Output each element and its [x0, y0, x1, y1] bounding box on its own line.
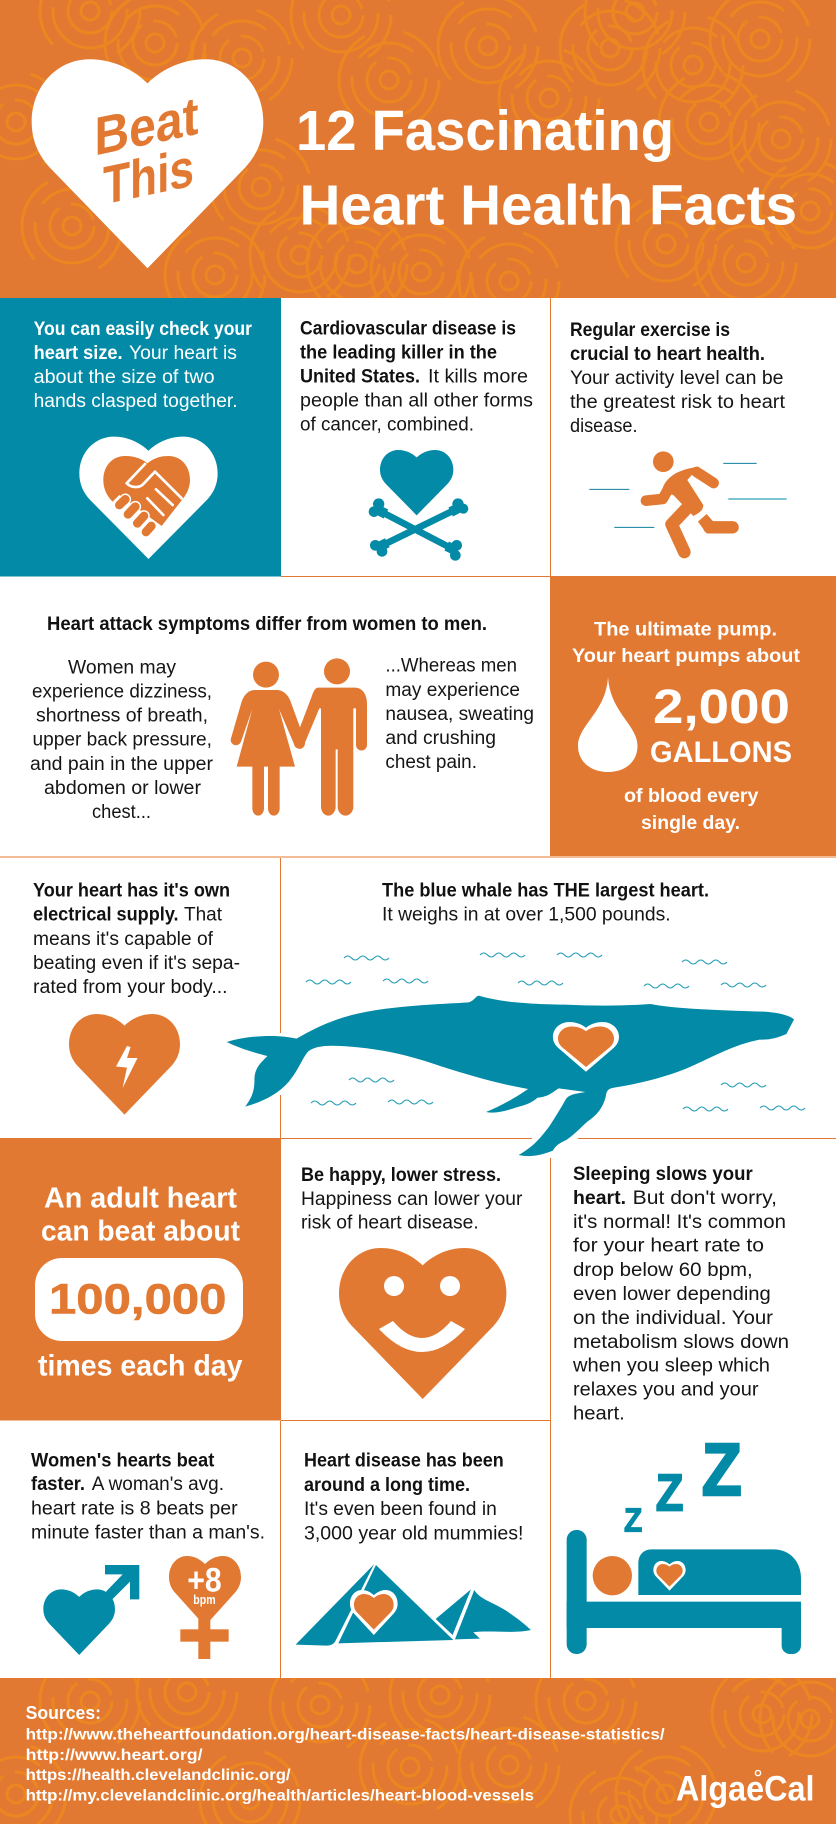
- panel: be happy: [301, 1165, 523, 1399]
- text: pump caption: [624, 786, 759, 834]
- text: sleeping: But don't worry,: [633, 1188, 777, 1209]
- icon: pyramids with heart: [296, 1564, 531, 1646]
- text: heart size: hands clasped together.: [34, 391, 238, 412]
- text: cardiovascular disease: of cancer, combined.: [300, 414, 474, 436]
- icon: runner: [589, 451, 787, 552]
- icon: whale heart: [553, 1022, 619, 1072]
- icon: sleeping z letters: Z: [656, 1465, 683, 1523]
- text: sources: https://health.clevelandclinic.org/: [26, 1767, 291, 1784]
- text: electrical supply: electrical supply.: [33, 905, 179, 926]
- icon: male heart: [43, 1565, 139, 1655]
- text: men symptoms: and crushing: [385, 728, 496, 749]
- text: men symptoms: ...Whereas men: [385, 656, 517, 677]
- text: cardiovascular disease: people than all other forms: [300, 390, 533, 412]
- text: adult heart beats: can beat about: [41, 1216, 240, 1248]
- text: women symptoms: experience dizziness,: [32, 682, 212, 703]
- text: mummies: It's even been found in: [304, 1499, 497, 1520]
- text: heart size: You can easily check your: [34, 319, 253, 340]
- text: women symptoms: chest...: [92, 802, 151, 823]
- text: heart size: [34, 319, 253, 412]
- panel: mummies: [296, 1450, 531, 1646]
- text: sleeping: relaxes you and your: [573, 1380, 759, 1401]
- text: sources: Sources:: [26, 1703, 101, 1723]
- icon: handshake heart: [79, 437, 218, 559]
- text: sleeping: for your heart rate to: [573, 1236, 764, 1257]
- text: cardiovascular disease: It kills more: [428, 366, 528, 388]
- header banner: [0, 0, 836, 331]
- text: cardiovascular disease: United States.: [300, 366, 420, 388]
- logo heart: Beat This: This: [103, 137, 194, 216]
- text: sleeping: heart.: [573, 1404, 625, 1424]
- panel: cardiovascular disease: [300, 318, 533, 561]
- text: sleeping: when you sleep which: [572, 1356, 770, 1377]
- logo heart: Beat This: [32, 59, 263, 268]
- text: electrical supply: rated from your body...: [33, 977, 228, 998]
- icon: female heart +8 bpm: +8: [187, 1562, 222, 1600]
- whale illustration: [227, 996, 794, 1156]
- icon: bed with sleeper: [567, 1530, 801, 1654]
- text: heart size: about the size of two: [34, 367, 215, 388]
- icon: blood drop: [578, 677, 638, 772]
- text: sleeping: drop below 60 bpm,: [573, 1260, 753, 1281]
- stat pill: 100,000: 100,000: [49, 1276, 226, 1324]
- icon: female heart +8 bpm: [169, 1556, 241, 1659]
- text: electrical supply: That: [184, 905, 223, 926]
- text: women's hearts: minute faster than a man's.: [31, 1523, 265, 1544]
- text: sleeping: heart.: [573, 1188, 626, 1209]
- text: mummies: [304, 1450, 524, 1544]
- title: Heart Health Facts: [300, 174, 797, 238]
- text: women symptoms: Women may: [68, 658, 177, 679]
- icon: female heart +8 bpm: bpm: [193, 1592, 216, 1607]
- text: regular exercise: [570, 320, 786, 437]
- text: sleeping: on the individual. Your: [573, 1308, 774, 1329]
- text: women symptoms: upper back pressure,: [32, 730, 212, 751]
- text: sources: http://my.clevelandclinic.org/health/articles/heart-blood-vessels: [26, 1788, 534, 1805]
- text: electrical supply: means it's capable of: [33, 929, 214, 950]
- text: regular exercise: Regular exercise is: [570, 320, 730, 341]
- panel: women's hearts: [31, 1450, 265, 1659]
- text: be happy: Happiness can lower your: [301, 1189, 523, 1210]
- logo: AlgaeCal: AlgaeCal: [676, 1770, 814, 1809]
- panel: blue whale: [227, 881, 805, 1156]
- text: women symptoms: abdomen or lower: [44, 778, 202, 799]
- text: regular exercise: disease.: [570, 416, 638, 437]
- text: electrical supply: beating even if it's sepa-: [33, 953, 240, 974]
- text: cardiovascular disease: the leading killer in the: [300, 342, 497, 364]
- text: electrical supply: [33, 881, 240, 998]
- text: pump caption: single day.: [641, 813, 740, 834]
- text: heart size: heart size.: [34, 343, 123, 364]
- text: regular exercise: crucial to heart health.: [570, 344, 765, 365]
- text: times each day: times each day: [38, 1350, 243, 1383]
- icon: sleeping z letters: [624, 1428, 742, 1539]
- icon: couple holding hands: [231, 658, 367, 816]
- text: sources: [26, 1703, 665, 1805]
- waves: [306, 953, 805, 1111]
- text: adult heart beats: An adult heart: [44, 1182, 237, 1214]
- text: pump heading: The ultimate pump.: [594, 620, 777, 640]
- footer: [0, 1678, 836, 1824]
- text: women's hearts: [31, 1450, 265, 1544]
- text: sources: http://www.theheartfoundation.org/heart-disease-facts/heart-disease-statistics/: [26, 1727, 665, 1744]
- text: mummies: around a long time.: [304, 1475, 470, 1496]
- text: blue whale: [382, 881, 709, 926]
- text: pump caption: of blood every: [624, 786, 759, 807]
- text: women's hearts: heart rate is 8 beats per: [31, 1499, 238, 1520]
- text: sleeping: even lower depending: [573, 1284, 771, 1305]
- icon: sleeping z letters: Z: [702, 1428, 742, 1511]
- text: blue whale: The blue whale has THE largest heart.: [382, 881, 709, 902]
- text: sources: http://www.heart.org/: [26, 1747, 203, 1764]
- text: be happy: Be happy, lower stress.: [301, 1165, 501, 1186]
- text: men symptoms: may experience: [385, 680, 520, 701]
- panel: ultimate pump: [550, 576, 836, 856]
- panel: adult heart beats: [0, 1138, 281, 1420]
- icon: heart and crossbones: [369, 450, 468, 561]
- stat: 2,000 gallons: 2,000: [653, 681, 790, 734]
- text: regular exercise: Your activity level can be: [570, 368, 784, 389]
- icon: heart with lightning bolt: [69, 1014, 180, 1115]
- icon: smiling heart: [339, 1248, 506, 1399]
- text: cardiovascular disease: [300, 318, 533, 436]
- text: women's hearts: faster.: [31, 1474, 85, 1495]
- text: sleeping: Sleeping slows your: [573, 1164, 753, 1185]
- text: be happy: risk of heart disease.: [301, 1213, 479, 1234]
- text: men symptoms: [385, 656, 534, 773]
- text: heart size: Your heart is: [129, 343, 237, 364]
- stat: 2,000 gallons: [650, 681, 792, 769]
- title: [296, 99, 797, 238]
- text: women's hearts: Women's hearts beat: [31, 1450, 215, 1471]
- panel: electrical supply: [33, 881, 240, 1115]
- text: pump heading: Your heart pumps about: [572, 646, 801, 667]
- text: mummies: 3,000 year old mummies!: [304, 1524, 524, 1544]
- heading: heart attack symptoms: Heart attack symptoms differ from women to men.: [47, 614, 487, 635]
- text: adult heart beats: [41, 1182, 240, 1248]
- text: women's hearts: A woman's avg.: [92, 1474, 224, 1495]
- panel: sleeping slows heart: [567, 1164, 801, 1654]
- text: mummies: Heart disease has been: [304, 1450, 504, 1471]
- text: regular exercise: the greatest risk to heart: [570, 392, 786, 413]
- text: sleeping: [572, 1164, 789, 1424]
- text: sleeping: metabolism slows down: [573, 1332, 789, 1353]
- text: women symptoms: shortness of breath,: [36, 706, 208, 727]
- text: men symptoms: chest pain.: [385, 752, 477, 773]
- text: cardiovascular disease: Cardiovascular disease is: [300, 318, 516, 340]
- text: men symptoms: nausea, sweating: [385, 704, 534, 725]
- title: 12 Fascinating: [296, 99, 674, 163]
- panel: heart attack symptoms: [30, 614, 534, 823]
- panel: regular exercise: [570, 320, 787, 552]
- text: blue whale: It weighs in at over 1,500 pounds.: [382, 905, 671, 926]
- stat pill: 100,000: [35, 1258, 243, 1341]
- text: women symptoms: [30, 658, 214, 823]
- text: be happy: [301, 1165, 523, 1234]
- logo heart: Beat This: Beat: [94, 85, 198, 167]
- stat: 2,000 gallons: GALLONS: [650, 736, 792, 769]
- text: electrical supply: Your heart has it's own: [33, 881, 230, 902]
- icon: sleeping z letters: Z: [624, 1502, 642, 1539]
- text: women symptoms: and pain in the upper: [30, 754, 214, 775]
- text: pump heading: [572, 620, 801, 667]
- text: sleeping: it's normal! It's common: [573, 1212, 786, 1233]
- panel: heart size: [0, 298, 281, 576]
- grid lines: [0, 298, 836, 1678]
